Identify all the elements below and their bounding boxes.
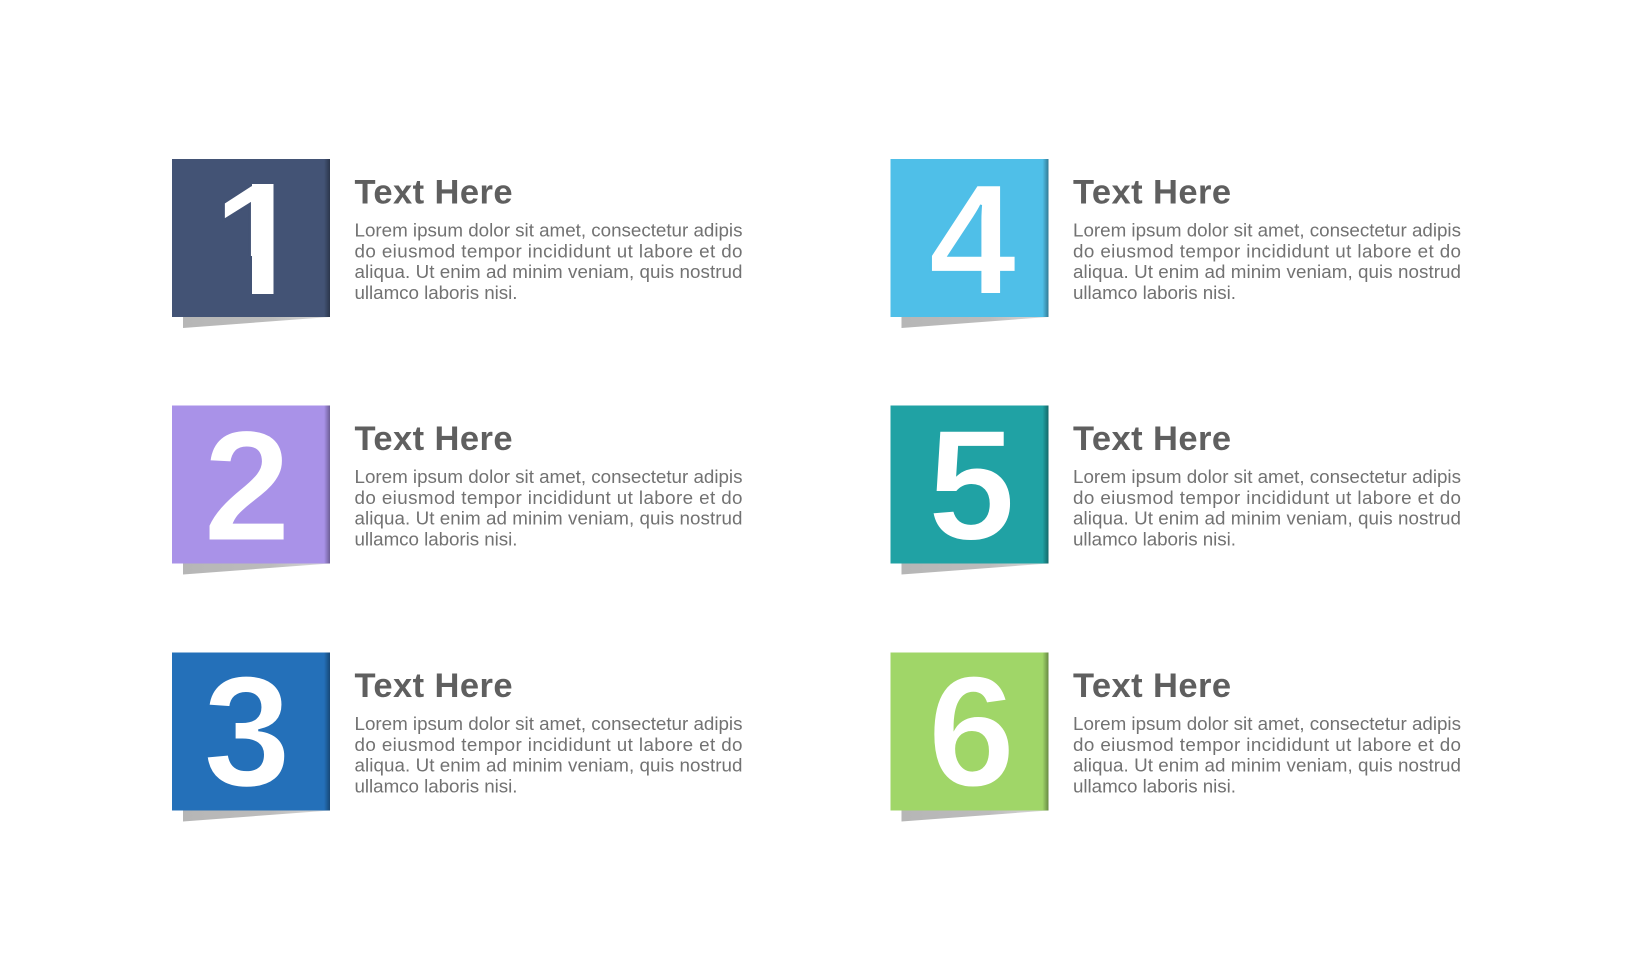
body text: ullamco laboris nisi. <box>1073 775 1236 796</box>
panel: item 1 <box>172 152 742 328</box>
number tile <box>890 159 1048 317</box>
heading: Text Here <box>354 420 512 458</box>
body text: aliqua. Ut enim ad minim veniam, quis nostrud <box>1073 261 1461 282</box>
body text: do eiusmod tempor incididunt ut labore et do <box>354 240 742 261</box>
panel: item 3 <box>172 644 742 822</box>
number 6: 6 <box>928 644 1015 820</box>
body text: Lorem ipsum dolor sit amet, consectetur adipis <box>354 466 742 487</box>
body text: Lorem ipsum dolor sit amet, consectetur adipis <box>1073 466 1461 487</box>
number 1 <box>224 184 274 294</box>
heading: Text Here <box>1073 667 1231 705</box>
number 5: 5 <box>928 398 1015 574</box>
body text: do eiusmod tempor incididunt ut labore et do <box>354 734 742 755</box>
body text: ullamco laboris nisi. <box>1073 282 1236 303</box>
heading: Text Here <box>354 174 512 212</box>
body text: ullamco laboris nisi. <box>354 775 518 796</box>
panel: item 5 <box>890 398 1461 574</box>
paper shadow <box>183 810 330 822</box>
paper shadow <box>902 564 1048 574</box>
panel: item 2 <box>172 398 742 574</box>
number 4: 4 <box>929 152 1017 328</box>
body text <box>354 220 742 303</box>
body text <box>354 713 742 796</box>
infographic canvas <box>172 159 1460 822</box>
body text: do eiusmod tempor incididunt ut labore et do <box>1073 487 1461 508</box>
body text: aliqua. Ut enim ad minim veniam, quis nostrud <box>354 508 742 529</box>
heading: Text Here <box>1073 420 1231 458</box>
body text: Lorem ipsum dolor sit amet, consectetur adipis <box>1073 713 1461 734</box>
body text: ullamco laboris nisi. <box>354 282 518 303</box>
number 2: 2 <box>203 398 291 574</box>
number tile <box>172 159 330 317</box>
heading: Text Here <box>354 667 512 705</box>
number tile <box>890 652 1048 810</box>
body text: Lorem ipsum dolor sit amet, consectetur adipis <box>354 220 742 240</box>
body text: do eiusmod tempor incididunt ut labore et do <box>1073 240 1461 261</box>
body text: Lorem ipsum dolor sit amet, consectetur adipis <box>354 713 742 734</box>
number 3: 3 <box>203 644 291 820</box>
body text: aliqua. Ut enim ad minim veniam, quis nostrud <box>354 261 742 282</box>
body text <box>354 466 742 549</box>
heading: Text Here <box>1073 174 1231 212</box>
number tile <box>890 406 1048 564</box>
paper shadow <box>183 564 330 574</box>
body text: ullamco laboris nisi. <box>354 528 518 549</box>
body text <box>1073 220 1461 303</box>
paper shadow <box>183 317 330 328</box>
body text: aliqua. Ut enim ad minim veniam, quis nostrud <box>354 755 742 776</box>
paper shadow <box>902 317 1048 328</box>
body text: aliqua. Ut enim ad minim veniam, quis nostrud <box>1073 508 1461 529</box>
body text: do eiusmod tempor incididunt ut labore et do <box>1073 734 1461 755</box>
panel: item 6 <box>890 644 1461 822</box>
body text <box>1073 713 1461 796</box>
number tile <box>172 652 330 810</box>
number 1: 1 <box>213 152 301 328</box>
body text: aliqua. Ut enim ad minim veniam, quis nostrud <box>1073 755 1461 776</box>
body text <box>1073 466 1461 549</box>
panel: item 4 <box>890 152 1461 328</box>
number tile <box>172 406 330 564</box>
body text: do eiusmod tempor incididunt ut labore et do <box>354 487 742 508</box>
paper shadow <box>902 810 1048 822</box>
body text: ullamco laboris nisi. <box>1073 528 1236 549</box>
body text: Lorem ipsum dolor sit amet, consectetur adipis <box>1073 220 1461 240</box>
